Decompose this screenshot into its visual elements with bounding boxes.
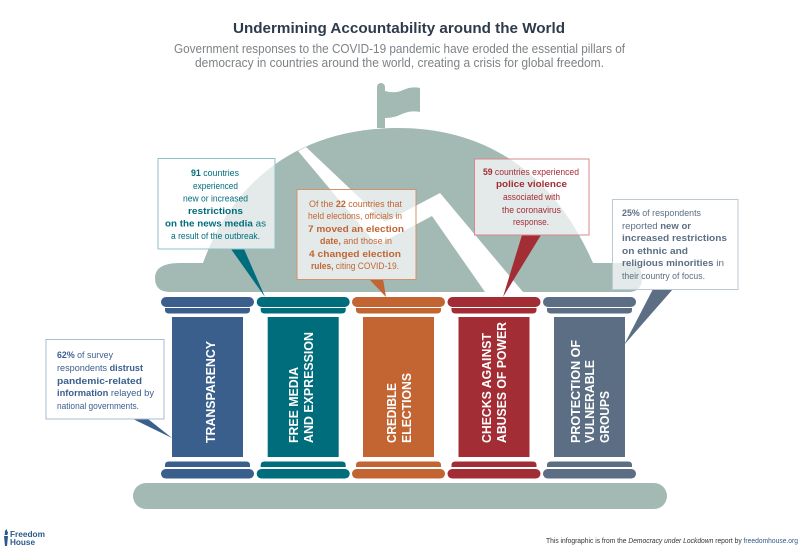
callout: police violence: [474, 159, 589, 297]
temple base: [133, 483, 667, 509]
callout: news media restrictions: experienced: [193, 181, 238, 191]
subtitle: [174, 42, 625, 70]
callout: ethnic and religious minorities: on ethnic and: [622, 246, 688, 256]
pillar: free media and expression: AND EXPRESSION: [301, 332, 316, 443]
subtitle: Government responses to the COVID-19 pandemic have eroded the essential pillars of: [174, 42, 625, 56]
callout: elections: date, and those in: [320, 236, 392, 246]
pillar: protection of vulnerable groups: [543, 297, 636, 478]
callout: police violence: 59 countries experienced: [483, 167, 579, 177]
temple roof: dome with flag and crack: [155, 83, 642, 292]
callout: elections: [297, 190, 416, 297]
logo: Freedom House: [4, 529, 45, 547]
callout: elections: held elections, officials in: [308, 211, 402, 221]
pillar: free media and expression: FREE MEDIA: [286, 366, 301, 443]
callout: distrust of information: national governments.: [57, 401, 139, 411]
pillar: protection of vulnerable groups: PROTECTION OF: [568, 340, 583, 443]
callout: elections: rules, citing COVID-19.: [311, 261, 399, 271]
callout: police violence: police violence: [496, 179, 567, 189]
callout: elections: 4 changed election: [309, 249, 401, 259]
callout: ethnic and religious minorities: reported new or: [622, 221, 692, 231]
pillar: protection of vulnerable groups: GROUPS: [597, 391, 612, 443]
callout: ethnic and religious minorities: their country of focus.: [622, 271, 705, 281]
callout: police violence: associated with: [503, 192, 560, 202]
callout: elections: Of the 22 countries that: [309, 199, 402, 209]
callout: news media restrictions: new or increased: [183, 194, 248, 204]
pillar: credible elections: ELECTIONS: [399, 373, 414, 443]
callout: ethnic and religious minorities: religious minorities in: [622, 258, 724, 268]
title: Undermining Accountability around the World: [233, 21, 565, 37]
callout: police violence: the coronavirus: [502, 205, 561, 215]
callout: distrust of information: [46, 340, 172, 438]
pillar: checks against abuses of power: CHECKS AGAINST: [479, 333, 494, 443]
logo: Freedom House: Freedom: [10, 530, 45, 539]
pillar: credible elections: [352, 297, 445, 478]
subtitle: democracy in countries around the world, creating a crisis for global freedom.: [195, 56, 604, 70]
source note: This infographic is from the Democracy under Lockdown report by freedomhouse.org: [546, 538, 798, 545]
callout: elections: 7 moved an election: [308, 224, 404, 234]
pillar: protection of vulnerable groups: VULNERABLE: [582, 360, 597, 443]
callout: news media restrictions: restrictions: [188, 206, 243, 216]
callout: news media restrictions: a result of the outbreak.: [171, 231, 260, 241]
callout: police violence: response.: [513, 217, 549, 227]
logo: Freedom House: House: [10, 538, 36, 547]
callout: ethnic and religious minorities: 25% of respondents: [622, 208, 701, 218]
pillar: credible elections: CREDIBLE: [384, 383, 399, 443]
callout: distrust of information: 62% of survey: [57, 350, 113, 360]
pillar: checks against abuses of power: ABUSES OF POWER: [494, 321, 509, 443]
pillar: transparency: TRANSPARENCY: [203, 341, 218, 443]
callout: ethnic and religious minorities: increased restrictions: [622, 233, 727, 243]
callout: distrust of information: respondents distrust: [57, 363, 143, 373]
callout: distrust of information: pandemic-related: [57, 376, 142, 386]
callout: news media restrictions: on the news media as: [165, 218, 267, 228]
callout: ethnic and religious minorities: [612, 200, 738, 345]
callout: news media restrictions: [158, 158, 275, 297]
pillar: checks against abuses of power: [448, 297, 540, 478]
pillar: free media and expression: [257, 297, 350, 478]
callout: distrust of information: information relayed by: [57, 388, 155, 398]
pillar: transparency: [161, 297, 254, 478]
callout: news media restrictions: 91 countries: [191, 168, 239, 178]
